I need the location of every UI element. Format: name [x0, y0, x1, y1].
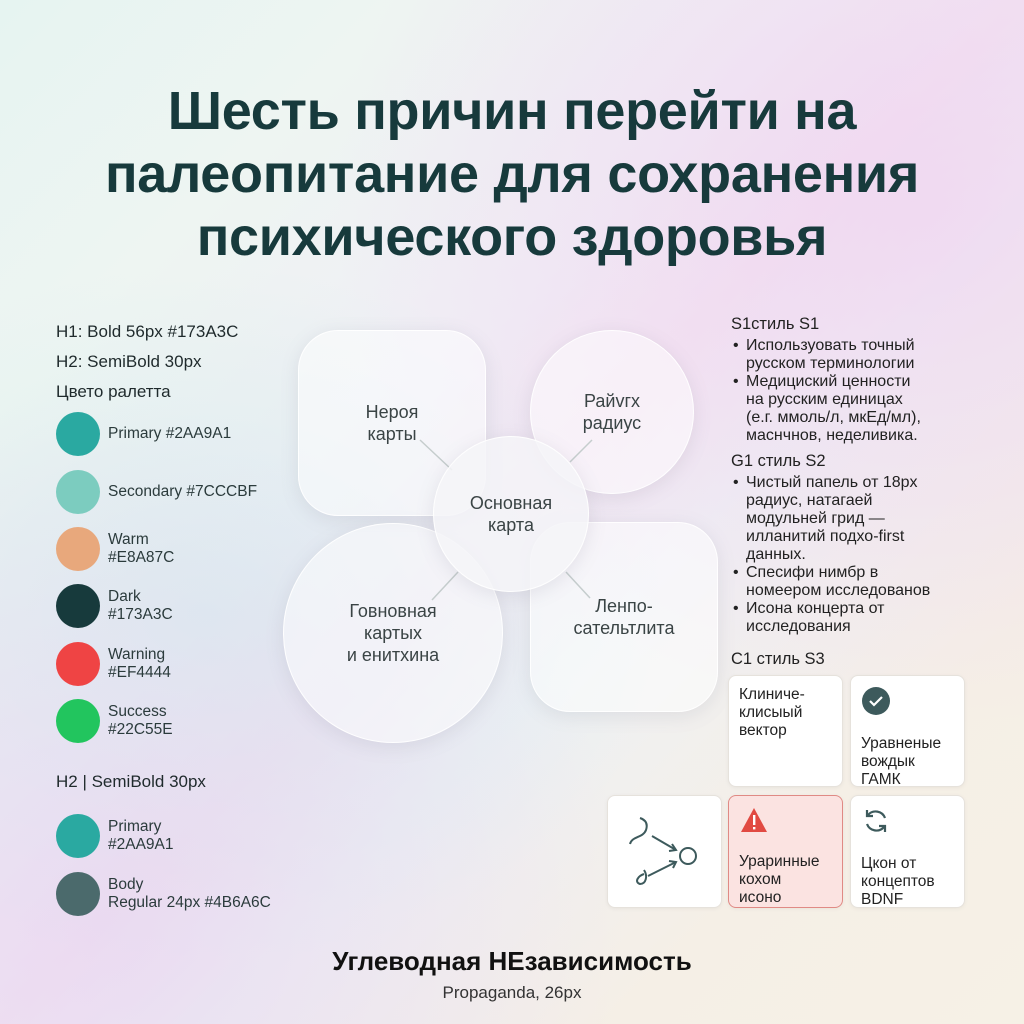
- card: bottom-right: Ленпо-: [595, 596, 653, 616]
- typography notes: Цвето ралетта: [56, 382, 171, 401]
- swatch body: Body: [108, 876, 143, 893]
- card: BDNF with refresh icon: Цкон от: [861, 855, 916, 872]
- style notes S3 heading: C1 стиль S3: [731, 650, 825, 668]
- typography notes: [56, 322, 238, 401]
- swatch warning: Warning: [108, 646, 165, 663]
- card: clinical vector: [728, 675, 843, 787]
- footer: Propaganda, 26px: [443, 983, 581, 1002]
- style notes S2: модульней грид —: [746, 510, 885, 527]
- card: top-left: Нероя: [366, 402, 418, 422]
- swatch primary: [56, 412, 231, 456]
- card: GABA with check icon: [850, 675, 965, 787]
- title: психического здоровья: [197, 207, 827, 267]
- style notes S2: Исона концерта от: [746, 600, 884, 617]
- card: clinical vector: вектор: [739, 722, 787, 739]
- style notes S2: исследования: [746, 618, 851, 635]
- swatch dark: Dark: [108, 588, 141, 605]
- swatch body: [56, 872, 271, 916]
- swatch secondary: [56, 470, 257, 514]
- style notes S2: номеером исследованов: [746, 582, 930, 599]
- swatch secondary: Secondary #7CCCBF: [108, 483, 257, 500]
- swatch primary 2: Primary: [108, 818, 161, 835]
- swatch warning: [56, 642, 171, 686]
- swatch warm: Warm: [108, 531, 149, 548]
- style notes S2: данных.: [746, 546, 806, 563]
- style notes S2: илланитий подхо-first: [746, 528, 904, 545]
- typography notes: H2: SemiBold 30px: [56, 352, 202, 371]
- center circle: Основная: [470, 493, 552, 513]
- card: top-right circle: [530, 330, 694, 494]
- style notes S1: русском терминологии: [746, 355, 914, 372]
- card: warning: кохом: [739, 871, 781, 888]
- card: clinical vector: Клиниче-: [739, 686, 805, 703]
- swatch primary 2: [56, 814, 174, 858]
- style notes S1: S1стиль S1: [731, 315, 819, 333]
- card: clinical vector: клисыый: [739, 704, 802, 721]
- card: warning: исоно: [739, 889, 781, 906]
- style notes S2: G1 стиль S2: [731, 452, 826, 470]
- card: GABA with check icon: ГАМК: [861, 771, 901, 788]
- card: GABA with check icon: вождык: [861, 753, 915, 770]
- card: top-right circle: Райvгх: [584, 391, 640, 411]
- h2 label: H2 | SemiBold 30px: [56, 772, 206, 791]
- swatch success: [56, 699, 173, 743]
- swatch dark: #173A3C: [108, 606, 173, 623]
- title: [105, 81, 919, 267]
- card: bottom-left circle: Говновная: [349, 601, 437, 621]
- swatch success: Success: [108, 703, 167, 720]
- swatch body: Regular 24px #4B6A6C: [108, 894, 271, 911]
- style notes S1: (е.г. ммоль/л, мкЕд/мл),: [746, 409, 921, 426]
- title: палеопитание для сохранения: [105, 144, 919, 204]
- card: GABA with check icon: Уравненые: [861, 735, 941, 752]
- swatch warning: #EF4444: [108, 664, 171, 681]
- card: BDNF with refresh icon: BDNF: [861, 891, 903, 908]
- center circle: карта: [488, 515, 534, 535]
- style notes S1: [731, 315, 921, 444]
- card: bottom-left circle: картых: [364, 623, 422, 643]
- swatch success: #22C55E: [108, 721, 173, 738]
- card: top-left: [298, 330, 486, 516]
- style notes S2: [731, 452, 930, 635]
- style notes S2: Чистый папель от 18px: [746, 474, 918, 491]
- swatch primary: Primary #2AA9A1: [108, 425, 231, 442]
- card: bottom-left circle: и енитхина: [347, 645, 439, 665]
- card: gut-brain diagram: [607, 795, 722, 908]
- center circle: [433, 436, 589, 592]
- card: bottom-right: сательтлита: [573, 618, 674, 638]
- card: bottom-right: [530, 522, 718, 712]
- style notes S1: Используовать точный: [746, 337, 915, 354]
- card: BDNF with refresh icon: [850, 795, 965, 908]
- footer: [332, 946, 692, 1002]
- style notes S2: Спесифи нимбр в: [746, 564, 878, 581]
- style notes S1: Медициский ценности: [746, 373, 910, 390]
- card: bottom-left circle: [283, 523, 503, 743]
- style notes S1: на русским единицах: [746, 391, 903, 408]
- typography notes: H1: Bold 56px #173A3C: [56, 322, 238, 341]
- card: warning: [728, 795, 843, 908]
- card: warning: Ураринные: [739, 853, 820, 870]
- swatch primary 2: #2AA9A1: [108, 836, 174, 853]
- card: top-left: карты: [367, 424, 417, 444]
- style notes S2: радиус, натагаей: [746, 492, 872, 509]
- style notes S1: маснчнов, неделивика.: [746, 427, 918, 444]
- swatch warm: [56, 527, 174, 571]
- title: Шесть причин перейти на: [168, 81, 856, 141]
- swatch dark: [56, 584, 173, 628]
- card: top-right circle: радиус: [583, 413, 641, 433]
- card: BDNF with refresh icon: концептов: [861, 873, 935, 890]
- footer: Углеводная НЕзависимость: [332, 946, 692, 976]
- swatch warm: #E8A87C: [108, 549, 174, 566]
